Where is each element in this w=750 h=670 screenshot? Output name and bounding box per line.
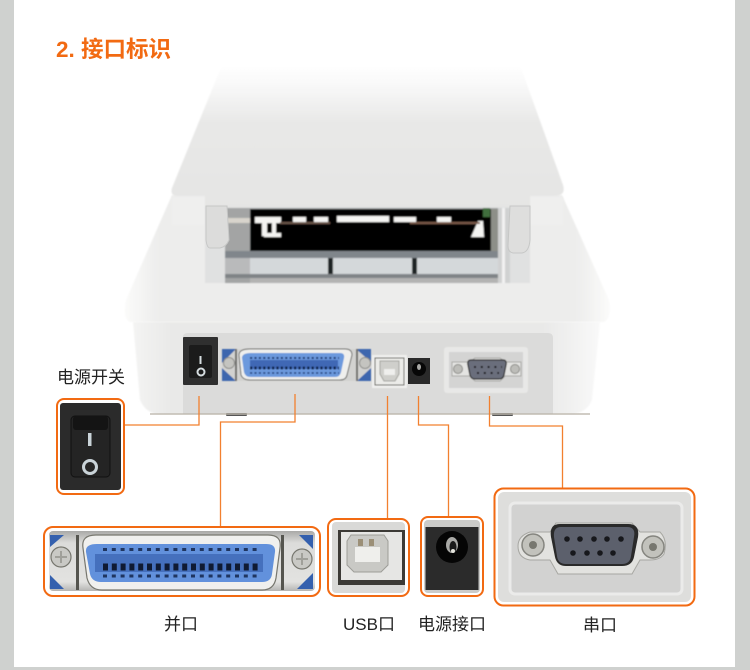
right notch band [530, 197, 563, 225]
small power jack [408, 358, 430, 384]
body front [133, 322, 600, 414]
small parallel port [222, 349, 371, 381]
line: power switch [124, 396, 199, 425]
printer body [125, 65, 610, 416]
label: power jack: 电源接口 [418, 615, 486, 634]
label: USB port: USB口 [343, 615, 395, 634]
leader lines [124, 394, 562, 527]
body shoulders [125, 195, 610, 322]
callout: USB port [328, 519, 409, 596]
paper window [205, 207, 530, 283]
line: power jack [418, 396, 448, 517]
line: USB port [386, 396, 388, 518]
top cover [172, 65, 564, 208]
small USB port [372, 355, 407, 388]
label: parallel port: 并口 [164, 615, 198, 634]
label: power switch: 电源开关 [57, 368, 125, 387]
feet [226, 413, 513, 416]
small power switch [183, 337, 218, 385]
callout: parallel port [44, 527, 320, 596]
white mechanism marks [255, 216, 484, 237]
callout: power jack [421, 517, 483, 596]
left notch band [172, 197, 205, 225]
title: 2. 接口标识 [56, 37, 171, 62]
small serial port [444, 347, 528, 393]
hinge right [508, 206, 530, 253]
rear panel [183, 333, 553, 414]
line: serial port [490, 396, 562, 488]
base shadow [150, 413, 590, 415]
callout: serial port [494, 488, 694, 606]
rollers [225, 251, 498, 258]
hinge left [206, 206, 229, 248]
callout: power switch [57, 399, 124, 494]
label: serial port: 串口 [583, 616, 617, 635]
line: parallel port [220, 394, 295, 527]
